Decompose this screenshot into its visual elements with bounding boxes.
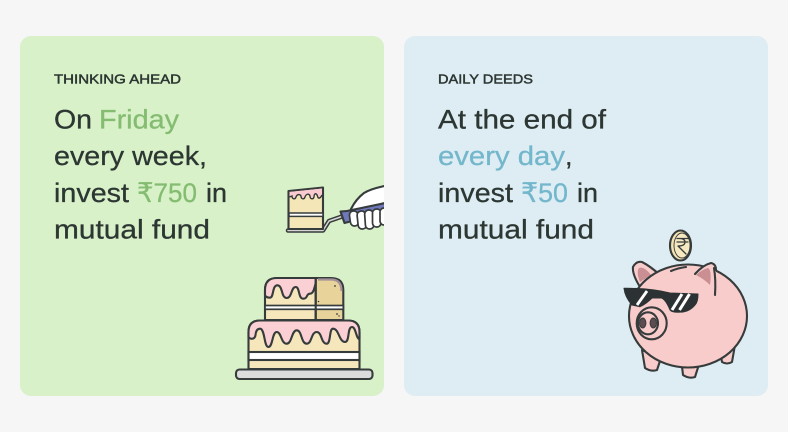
body	[629, 264, 747, 368]
text block: daily investment: ₹50	[521, 178, 568, 208]
text block: Friday investment: in	[206, 178, 227, 208]
text block: Friday investment: invest	[54, 178, 130, 208]
icon: rupee coin	[670, 230, 691, 260]
text block: Friday investment: mutual fund	[54, 214, 210, 244]
text block: Friday investment	[54, 104, 227, 244]
legs	[642, 350, 661, 371]
text block: Friday investment: ₹750	[137, 178, 197, 208]
text block: daily investment: mutual fund	[438, 214, 594, 244]
panel: daily deeds	[404, 36, 768, 396]
right ear	[695, 263, 716, 288]
heading: daily deeds: DAILY DEEDS	[438, 72, 533, 86]
hand palm	[350, 185, 384, 210]
top tier	[265, 278, 343, 320]
text block: Friday investment: Friday	[99, 104, 180, 134]
text block: Friday investment: On	[54, 104, 92, 134]
sunglasses	[624, 288, 698, 312]
icon: tiered cake	[236, 278, 372, 379]
fingers	[349, 208, 388, 229]
icon: piggy bank with sunglasses	[624, 262, 747, 378]
text block: daily investment: in	[577, 178, 598, 208]
text block: Friday investment: every week,	[54, 141, 207, 171]
left ear	[633, 262, 660, 287]
handle	[340, 202, 390, 223]
server blade and neck	[288, 216, 342, 230]
text block: daily investment: every day	[438, 141, 566, 171]
text block: daily investment: invest	[438, 178, 514, 208]
snout	[637, 307, 667, 339]
heading: thinking ahead: THINKING AHEAD	[54, 72, 181, 86]
text block: daily investment	[438, 104, 607, 244]
text block: daily investment: ,	[565, 141, 573, 171]
bottom tier	[248, 320, 360, 369]
text block: daily investment: At the end of	[438, 104, 607, 134]
icon: cake slice on server held by hand	[288, 185, 390, 230]
plate	[236, 370, 372, 379]
panel: thinking ahead	[20, 36, 390, 396]
slice	[288, 188, 323, 229]
